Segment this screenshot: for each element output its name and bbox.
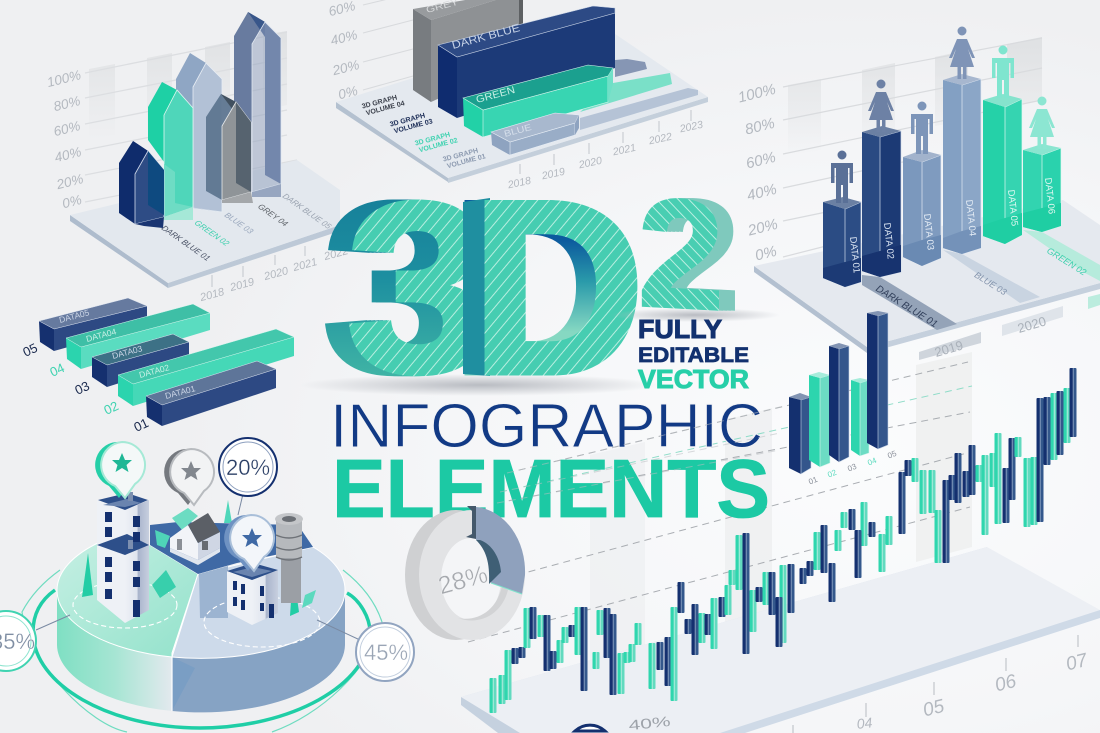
panel: candlestick platform — [461, 352, 1100, 733]
axis labels: 40% — [53, 144, 83, 165]
bar labels: 05 — [886, 449, 898, 461]
platform legend strips: GREEN 02 — [1045, 245, 1088, 277]
platform legend strips: BLUE 03 — [973, 270, 1009, 297]
letter D: D — [468, 150, 640, 424]
inner wall — [458, 586, 508, 620]
platform — [336, 21, 708, 183]
candlestick chart — [490, 368, 1076, 713]
axis labels: 0% — [753, 243, 778, 265]
dashed overlay across headline — [497, 407, 780, 503]
digit 3: 3 — [330, 153, 476, 423]
bar 02 — [809, 372, 830, 467]
bar green — [463, 65, 672, 137]
callout 45 percent — [356, 623, 414, 681]
donut extrusion — [405, 510, 507, 640]
year axis: 2018 — [506, 175, 532, 192]
bar data 03: DATA03 — [111, 343, 144, 361]
row numbers: 02 — [101, 398, 121, 418]
pin: blue star — [224, 515, 274, 571]
highlighted slice — [476, 507, 525, 594]
backdrop stripes — [590, 352, 972, 665]
platform — [70, 160, 340, 288]
donut chart 28 percent — [405, 506, 525, 640]
callout 20 percent — [219, 438, 277, 496]
grid backdrop — [783, 37, 1042, 257]
bar data 03 — [92, 334, 189, 387]
year axis — [198, 239, 350, 304]
axis labels: 40% — [745, 181, 779, 205]
axis labels: 20% — [330, 57, 361, 78]
column dark blue 05 — [234, 12, 281, 197]
year axis: 2019 — [228, 276, 256, 294]
letter D: D — [464, 150, 636, 424]
axis labels: 100% — [736, 81, 778, 107]
heading: 3D — [300, 150, 780, 424]
axis ticks and numbers: 04 — [856, 714, 873, 732]
panel: horizontal volume chart — [327, 0, 708, 192]
callout 35 percent — [0, 611, 36, 671]
volume labels: 3D GRAPH — [361, 94, 398, 111]
subtitle: fully editable vector: FULLY — [638, 314, 722, 344]
volume labels: 3D GRAPH — [442, 147, 479, 164]
bar dark blue: DARK BLUE — [451, 22, 521, 52]
subtitle: fully editable vector: EDITABLE — [638, 344, 749, 367]
panel: people bar chart — [736, 26, 1100, 360]
bar data 02 — [118, 329, 294, 406]
year axis: 2018 — [198, 286, 226, 304]
axis labels: 60% — [52, 118, 82, 139]
axis labels: 20% — [745, 216, 780, 240]
bar 05 with man — [983, 46, 1022, 244]
chimney stack — [275, 513, 303, 603]
digit 2: 2 — [646, 165, 732, 342]
axis labels — [45, 67, 85, 211]
column green 02 — [148, 82, 193, 220]
column grey 04 — [206, 94, 253, 203]
letter D: D — [460, 150, 632, 424]
bar blue: BLUE — [503, 122, 533, 139]
volume labels: VOLUME 03 — [393, 118, 434, 135]
house — [170, 513, 220, 565]
year axis: 2021 — [611, 142, 637, 159]
digit 3: 3 — [342, 153, 488, 423]
volume labels: 3D GRAPH — [414, 131, 451, 148]
bar 02 with woman — [862, 80, 901, 277]
orbit rings — [22, 570, 382, 732]
panel: isometric city pie chart — [0, 438, 414, 732]
slice: dark blue raised — [150, 522, 313, 574]
slice: green — [57, 542, 198, 657]
column labels: DARK BLUE 05 — [280, 192, 333, 231]
right building — [227, 563, 278, 625]
axis labels — [736, 81, 780, 265]
panel: data bars left — [20, 298, 294, 435]
row numbers: 05 — [20, 340, 40, 360]
subtitle: fully editable vector — [638, 314, 749, 394]
volume labels: 3D GRAPH — [389, 112, 426, 129]
column labels — [159, 192, 333, 263]
axis labels: 100% — [45, 67, 82, 90]
connector lines — [36, 494, 360, 640]
slice: light blue — [172, 547, 345, 658]
bar data 05 — [39, 298, 147, 351]
column labels: BLUE 03 — [222, 211, 255, 236]
bar labels: 01 — [807, 475, 819, 487]
digit 3: 3 — [322, 153, 468, 423]
dashed plots — [73, 582, 320, 647]
small 3D bar chart — [789, 311, 898, 487]
callout 45 percent: 45% — [364, 640, 408, 665]
axis labels: 40% — [329, 27, 359, 48]
axis labels: 0% — [337, 83, 359, 102]
column dark blue 01 — [119, 141, 164, 228]
bar 03 — [829, 343, 849, 462]
year axis — [506, 110, 704, 192]
bar 05 — [867, 311, 888, 449]
40 percent marker: 40% — [628, 713, 671, 733]
year axis: 2022 — [647, 131, 673, 148]
bar data 01: DATA01 — [164, 383, 197, 401]
pin: green star — [95, 442, 145, 498]
bar dark blue — [438, 6, 647, 118]
bar 01 with man: DATA 01 — [847, 236, 862, 274]
bar data 04 — [66, 304, 210, 369]
bar grey — [413, 0, 523, 102]
year axis: 2020 — [262, 265, 290, 283]
bar 05 with man: DATA 05 — [1005, 189, 1020, 227]
bar labels: 02 — [826, 468, 838, 480]
pin: grey star — [164, 449, 214, 505]
bar data 04: DATA04 — [85, 326, 118, 344]
letter D: D — [452, 150, 624, 424]
grid backdrop — [85, 31, 297, 202]
bar data 05: DATA05 — [58, 307, 91, 325]
gems and cones — [82, 500, 316, 616]
axis labels: 0% — [61, 192, 83, 211]
row numbers: 01 — [131, 415, 151, 435]
digit 2: 2 — [654, 165, 740, 342]
axis ticks and numbers: 06 — [993, 671, 1019, 696]
year axis: 2022 — [322, 245, 350, 263]
bar 01 with man — [823, 150, 862, 287]
digit 3: 3 — [334, 153, 480, 423]
digit 3: 3 — [326, 153, 472, 423]
digit 2 — [610, 165, 780, 342]
column labels: DARK BLUE 01 — [159, 224, 212, 263]
panel: pentagon column chart — [45, 12, 350, 304]
axis ticks and numbers: 05 — [921, 696, 947, 721]
year tags: 2020 — [1016, 313, 1048, 336]
bar 04 — [851, 378, 869, 456]
bar 01 — [789, 393, 811, 474]
column labels: GREEN 02 — [192, 219, 232, 248]
40 percent marker — [575, 713, 671, 733]
donut hole — [441, 538, 501, 620]
bar blue — [491, 88, 698, 155]
ground shadow — [300, 374, 660, 396]
bar 03 with man — [903, 102, 941, 266]
pie sides — [57, 590, 345, 712]
platform legend strips — [862, 230, 1100, 330]
digit 2: 2 — [638, 165, 724, 342]
digit 2: 2 — [650, 165, 736, 342]
bar green: GREEN — [475, 85, 516, 106]
heading: infographic: INFOGRAPHIC — [330, 391, 763, 461]
bar labels — [807, 449, 898, 487]
axis labels: 60% — [744, 149, 778, 173]
column labels: GREY 04 — [256, 202, 290, 228]
bar labels: 04 — [866, 456, 878, 468]
axis ticks and numbers — [793, 635, 1091, 733]
platform — [754, 200, 1100, 353]
digit 2: 2 — [642, 165, 728, 342]
bar labels: 03 — [846, 462, 858, 474]
letter D: D — [472, 150, 644, 424]
subtitle: fully editable vector: VECTOR — [638, 364, 749, 394]
callout 20 percent: 20% — [226, 455, 270, 480]
axis ticks and numbers: 07 — [1064, 650, 1091, 675]
bar data 01 — [146, 361, 276, 426]
digit 3: 3 — [338, 153, 484, 423]
year tags — [919, 294, 1100, 360]
platform legend strips: DARK BLUE 01 — [873, 284, 939, 330]
bar 03 with man: DATA 03 — [921, 213, 936, 251]
row numbers: 04 — [47, 360, 67, 380]
volume labels — [361, 93, 487, 171]
year axis: 2019 — [540, 166, 566, 183]
volume labels: VOLUME 04 — [365, 100, 406, 117]
bar 04 with woman — [943, 26, 981, 254]
dashed guide lines — [468, 362, 972, 642]
slice wall — [199, 566, 228, 618]
bar data 02: DATA02 — [138, 362, 171, 380]
letter D: D — [456, 150, 628, 424]
row numbers — [20, 340, 151, 435]
axis labels: 20% — [54, 171, 85, 192]
volume labels: VOLUME 02 — [418, 137, 459, 154]
bar 02 with woman: DATA 02 — [881, 222, 896, 260]
year axis: 2023 — [678, 119, 704, 136]
column blue 03 — [176, 53, 222, 212]
axis labels: 80% — [743, 115, 777, 139]
platform — [461, 547, 1100, 733]
axis labels — [327, 0, 413, 102]
year tags: 2019 — [933, 337, 965, 360]
tower — [97, 492, 149, 623]
donut value: 28% — [435, 560, 491, 600]
axis labels: 80% — [52, 93, 82, 114]
bar 06 with woman: DATA 06 — [1042, 177, 1057, 215]
row numbers: 03 — [72, 378, 92, 398]
bar 06 with woman — [1023, 96, 1061, 232]
heading: elements: ELEMENTS — [332, 442, 770, 535]
donut face — [419, 510, 525, 640]
digit 3: 3 — [346, 153, 492, 423]
year axis: 2021 — [291, 256, 319, 274]
bar 04 with woman: DATA 04 — [963, 199, 978, 237]
year axis: 2020 — [577, 155, 603, 172]
volume labels: VOLUME 01 — [446, 153, 487, 170]
